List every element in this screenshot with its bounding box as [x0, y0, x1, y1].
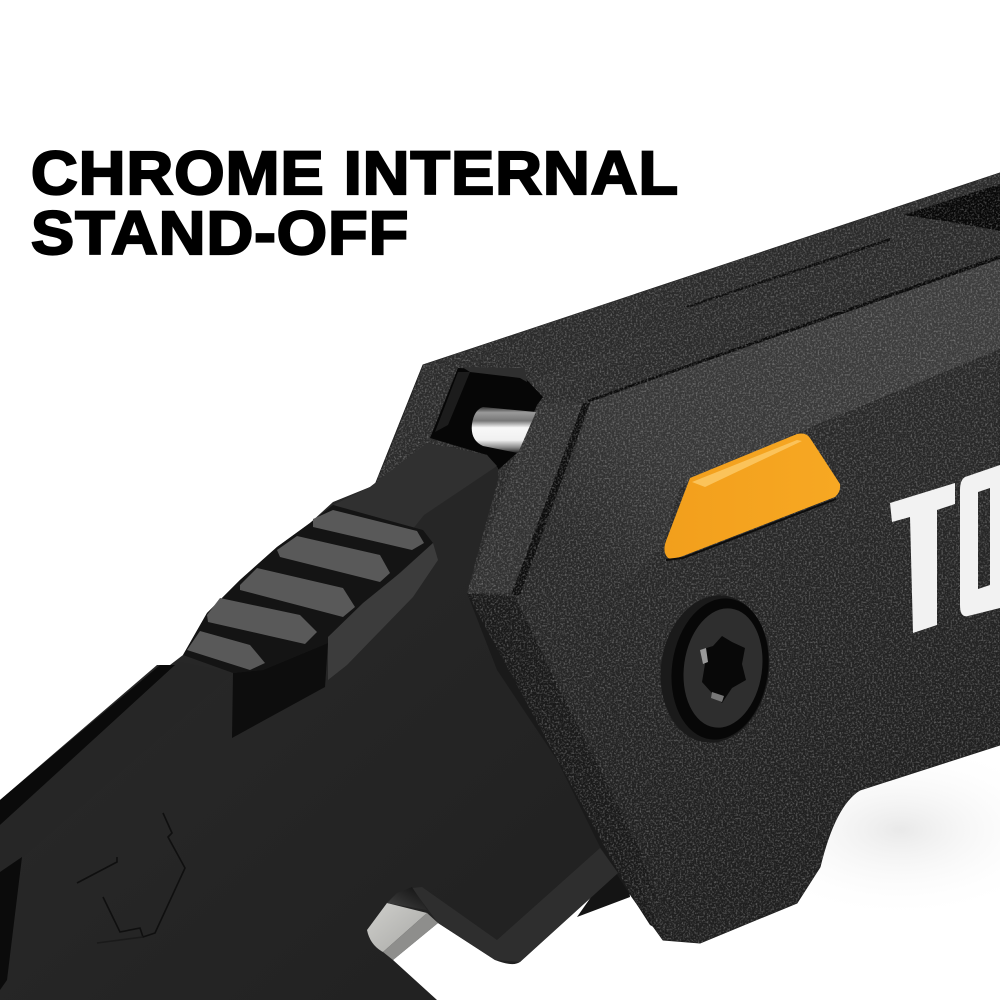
prong band — [412, 848, 618, 962]
blade top wedge — [333, 443, 497, 530]
chrome internal stand-off pin — [472, 407, 536, 453]
silver blade tip — [367, 887, 438, 960]
embossed shield logo — [77, 813, 185, 943]
left strips — [0, 665, 175, 825]
dark backing of ridges — [183, 505, 433, 673]
handle nose around pin slot — [430, 367, 543, 470]
torx screw — [651, 588, 779, 750]
back prong behind handle — [577, 870, 630, 917]
floor shadow — [730, 740, 1000, 920]
handle silhouette — [375, 173, 1000, 943]
title: CHROME INTERNAL — [31, 139, 679, 207]
title — [31, 139, 679, 267]
title: STAND-OFF — [31, 199, 409, 267]
orange thumb button — [664, 434, 840, 560]
white logo lettering on handle — [890, 465, 1000, 633]
black blade carrier with thumb ridges — [0, 443, 618, 1000]
thumb ridges — [187, 510, 424, 670]
handle top surface — [423, 173, 1000, 402]
dark notch — [232, 643, 328, 738]
light side band — [328, 543, 438, 680]
handle surface texture — [370, 170, 1000, 950]
handle lit band and facets — [467, 259, 1000, 943]
